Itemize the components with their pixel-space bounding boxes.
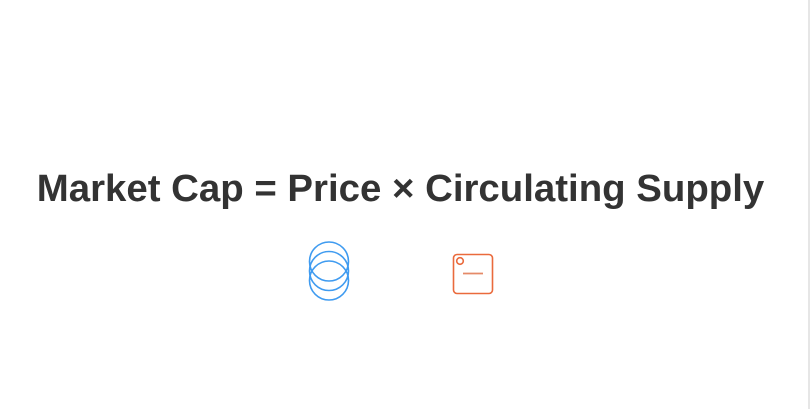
title: Market Cap = Price × Circulating Supply xyxy=(37,167,764,210)
